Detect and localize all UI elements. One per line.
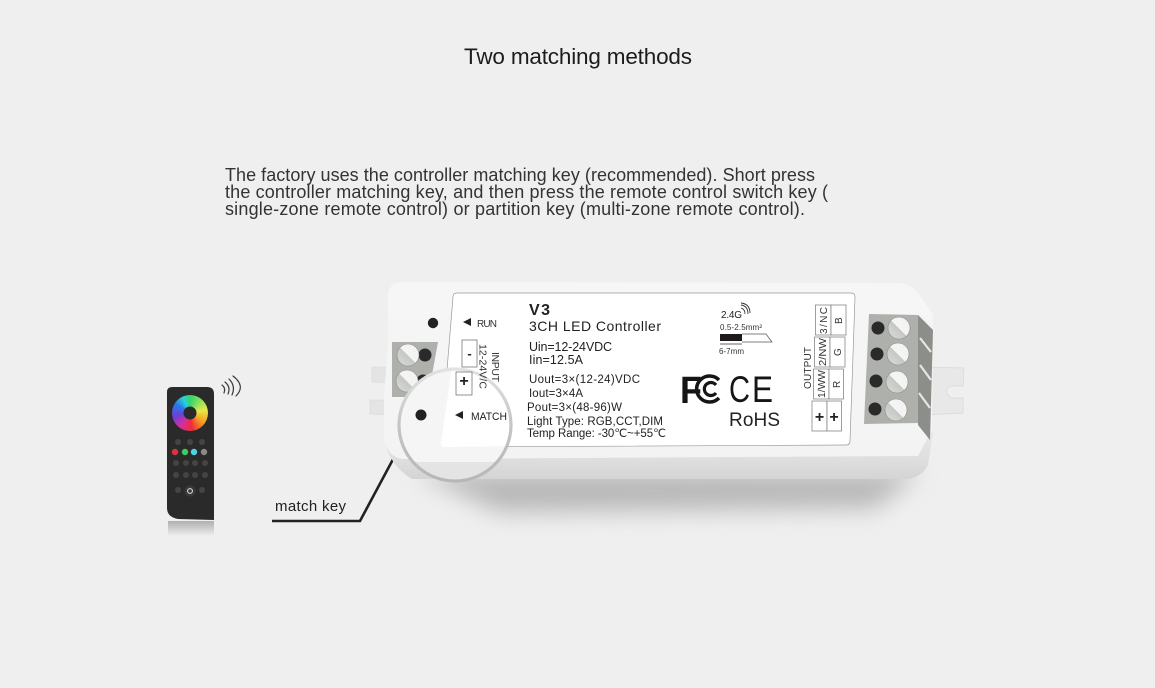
wire strip diagram: 0.5-2.5mm² [720, 323, 762, 332]
FCC logo: F [680, 370, 702, 412]
input rotated labels: 12-24V/C [476, 344, 488, 389]
specification text: Uin=12-24VDC [529, 340, 612, 354]
specification text: Temp Range: -30℃~+55℃ [527, 428, 666, 440]
wire strip diagram: 6-7mm [719, 347, 744, 356]
right mounting tab [925, 367, 964, 415]
title: Two matching methods [464, 44, 692, 69]
output plus signs [815, 409, 839, 426]
CE logo: C [729, 369, 750, 410]
output terminal labels: B [834, 317, 845, 324]
wireless signal waves [222, 376, 240, 396]
CE logo: E [752, 369, 773, 410]
left terminal block [392, 342, 438, 397]
output terminal labels: R [832, 381, 843, 388]
match hole [416, 410, 426, 420]
leader line for match key [272, 450, 398, 521]
remote reflection [168, 521, 214, 536]
specification text: Pout=3×(48-96)W [527, 402, 622, 414]
output plus signs: + [815, 409, 824, 426]
specification text: 3CH LED Controller [529, 318, 661, 334]
LED controller [370, 282, 964, 512]
remote buttons [172, 439, 208, 496]
left mounting tabs [370, 367, 398, 415]
input polarity boxes [456, 340, 477, 395]
RUN indicator: RUN [477, 319, 497, 330]
right terminal block [864, 314, 933, 440]
indicator hole RUN [428, 318, 438, 328]
remote body [167, 387, 214, 520]
match key label: match key [275, 498, 346, 515]
housing top face [384, 282, 933, 459]
input rotated labels [476, 344, 501, 389]
controller shadow [415, 472, 920, 512]
remote control [167, 376, 240, 536]
wire strip diagram [719, 323, 772, 356]
specification text: Iout=3×4A [529, 388, 583, 400]
output terminal labels: OUTPUT [803, 347, 814, 389]
input rotated labels: INPUT [489, 352, 501, 383]
MATCH indicator: MATCH [471, 411, 507, 423]
output terminal labels [803, 307, 845, 398]
specification text: Iin=12.5A [529, 353, 584, 367]
RoHS mark: RoHS [729, 410, 780, 431]
specification text: V3 [529, 302, 550, 319]
input polarity boxes: - [467, 346, 472, 361]
output terminal labels: 2/NW [818, 337, 829, 366]
CE logo [729, 369, 773, 410]
infographic canvas [167, 48, 964, 534]
output terminal table [812, 305, 846, 431]
output terminal labels: 1/WW [817, 369, 828, 398]
magnifier fill [408, 371, 505, 480]
magnifier ring [399, 369, 511, 481]
description text block: the controller matching key, and then press the remote control switch key ( [225, 182, 828, 202]
2.4G wireless mark: 2.4G [721, 310, 742, 321]
housing lower edge [384, 432, 933, 479]
output plus signs: + [829, 409, 839, 426]
2.4G wireless mark [721, 303, 750, 321]
description text block: The factory uses the controller matching key (recommended). Short press [225, 165, 815, 185]
specification text: Light Type: RGB,CCT,DIM [527, 416, 663, 428]
FCC logo [680, 370, 719, 412]
colour wheel centre [184, 406, 196, 420]
description text block: single-zone remote control) or partition key (multi-zone remote control). [225, 199, 805, 219]
RUN indicator [463, 318, 497, 330]
specification text [527, 302, 666, 440]
output terminal labels: 3/NC [819, 307, 830, 334]
product label [441, 293, 855, 447]
output terminal labels: G [833, 348, 844, 356]
input polarity boxes: + [459, 373, 469, 390]
description text block [225, 165, 828, 219]
MATCH indicator [455, 411, 507, 423]
colour wheel [172, 395, 208, 431]
specification text: Uout=3×(12-24)VDC [529, 374, 640, 386]
